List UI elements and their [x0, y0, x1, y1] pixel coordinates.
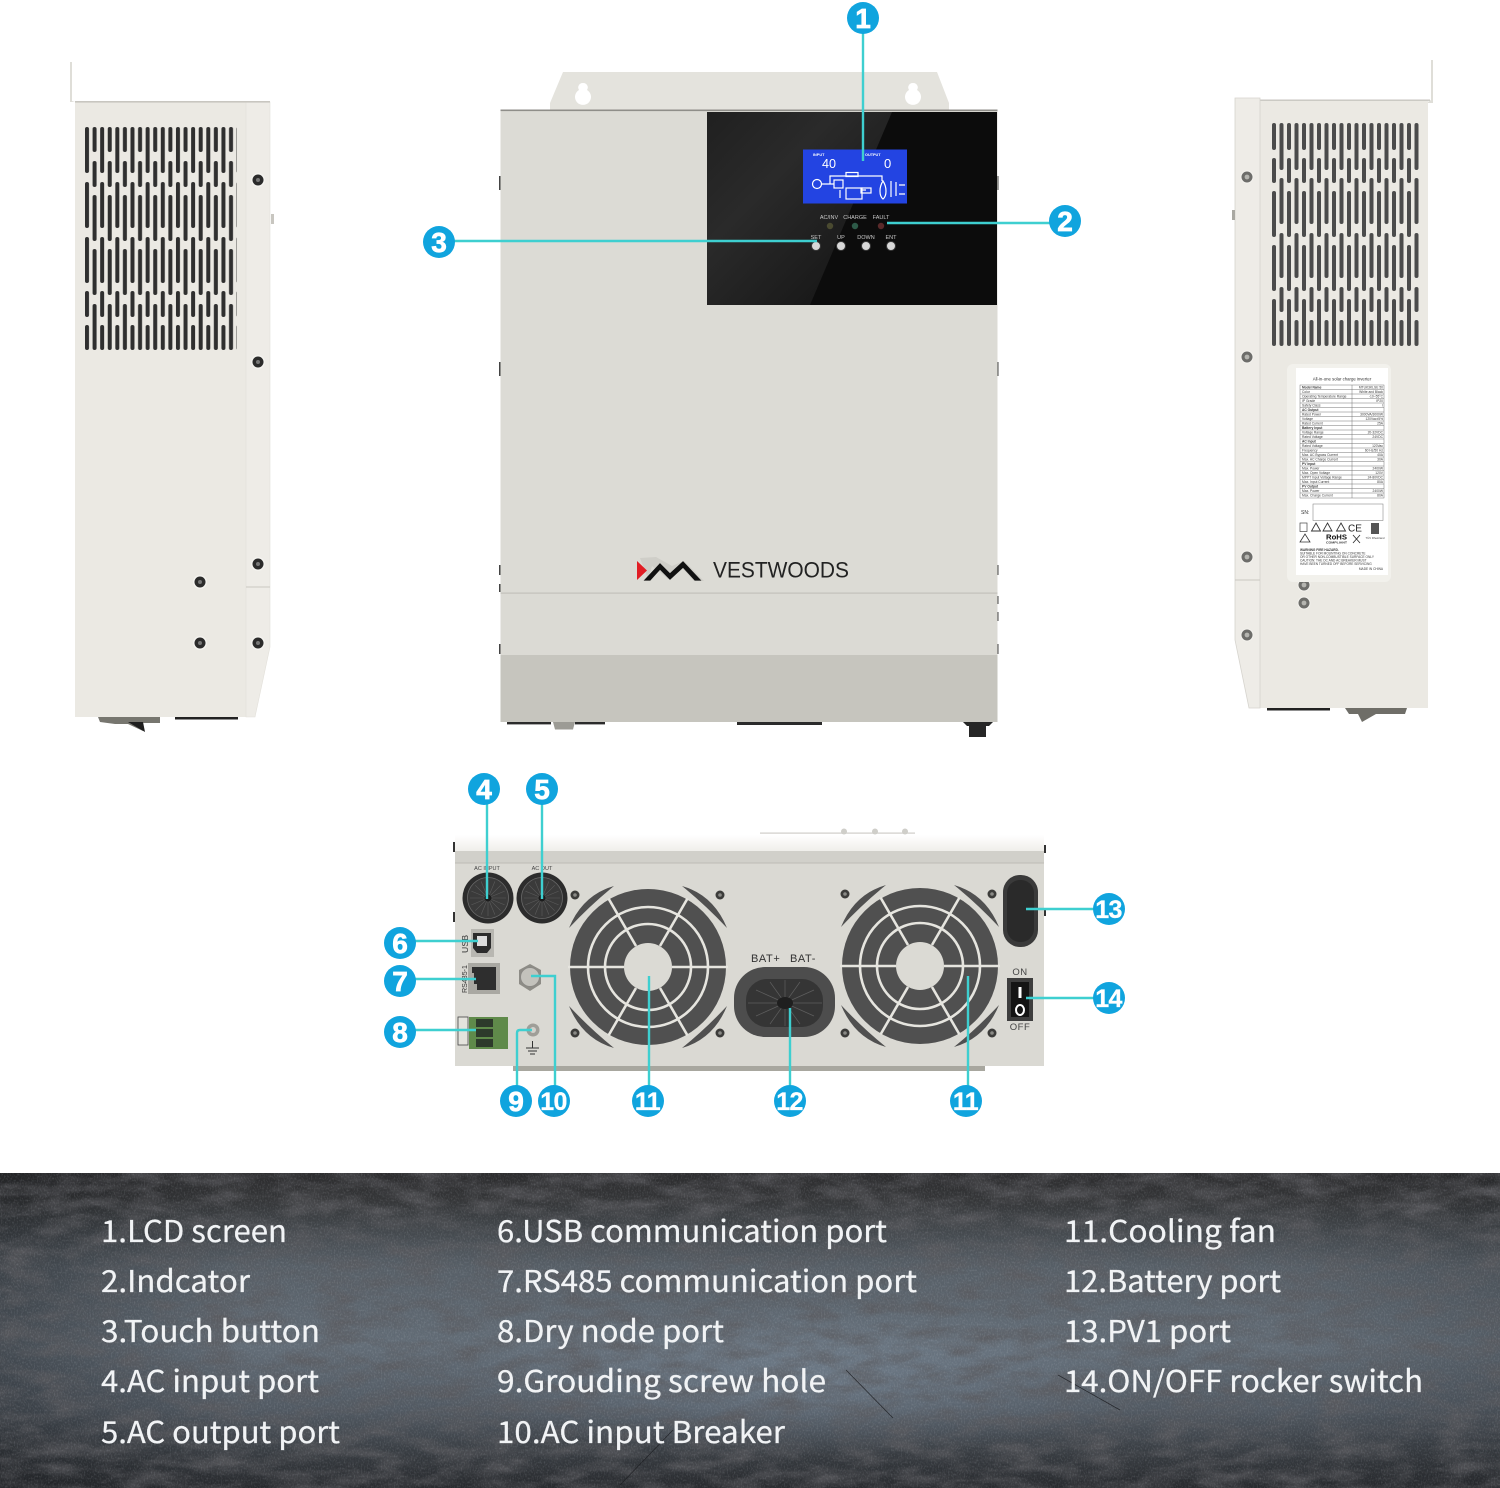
callout 11: cooling fan right: 11	[953, 1088, 979, 1116]
callout 10: AC input breaker	[531, 976, 570, 1117]
indicator labels: DOWN	[857, 235, 875, 241]
label spec table: Max. AC Charge Current	[1302, 458, 1338, 462]
label spec table: Battery Input	[1302, 426, 1323, 430]
legend column 1: 5.AC output port	[101, 1408, 340, 1452]
callout 12: battery port	[774, 1008, 806, 1117]
callout 11: cooling fan left	[632, 976, 664, 1117]
callout 4: AC input port	[468, 773, 500, 899]
certification marks: CE	[1348, 524, 1362, 534]
label spec table: 40A	[1377, 453, 1384, 457]
cooling fan left	[568, 886, 728, 1048]
label spec table: White and Black	[1359, 390, 1383, 394]
panel: left side view	[70, 62, 274, 732]
left side strip	[246, 102, 270, 717]
fan left screws	[570, 890, 724, 1038]
legend column 2: 9.Grouding screw hole	[497, 1357, 826, 1401]
warning text: HAVE BEEN TURNED OFF BEFORE SERVICING	[1300, 562, 1372, 566]
legend column 2: 10.AC input Breaker	[497, 1408, 785, 1452]
right side body	[1260, 100, 1428, 708]
legend column 2	[497, 1207, 917, 1452]
indicator labels: CHARGE	[843, 215, 867, 221]
label spec table: 120V	[1375, 471, 1384, 475]
LCD screen	[803, 150, 907, 204]
label spec table: 2400W	[1373, 466, 1384, 470]
LCD screen: 40	[822, 156, 836, 171]
control panel	[707, 112, 997, 305]
callout 11: cooling fan right	[950, 976, 982, 1117]
callout 9: grounding screw hole	[500, 1030, 532, 1117]
warning text: SUITABLE FOR MOUNTING ON CONCRETE	[1300, 552, 1365, 556]
label spec table: 2400W	[1373, 489, 1384, 493]
AC port labels: AC INPUT	[474, 866, 500, 872]
callout 13: PV1 port	[1026, 893, 1125, 925]
callout 3: touch button: 3	[431, 227, 447, 258]
left side screws	[193, 173, 265, 650]
indicator labels: SET	[811, 235, 822, 241]
label spec table: 30A	[1377, 458, 1384, 462]
touch buttons	[812, 242, 896, 250]
right side feet	[1267, 708, 1407, 722]
legend column 3: 12.Battery port	[1064, 1257, 1281, 1301]
legend column 2: 6.USB communication port	[497, 1207, 887, 1251]
callout 13: PV1 port: 13	[1095, 896, 1122, 924]
certification marks	[1300, 523, 1385, 544]
front side nubs	[499, 176, 998, 654]
AC port labels	[474, 866, 553, 872]
fan right screws	[840, 890, 996, 1038]
AC input breaker	[519, 964, 541, 991]
certification marks: RoHS	[1326, 532, 1347, 542]
AC input grommet	[462, 872, 514, 924]
dry node port	[458, 1017, 508, 1049]
RS485 port	[460, 963, 500, 994]
LCD screen: OUTPUT	[865, 153, 881, 157]
label spec table: Voltage	[1302, 417, 1313, 421]
panel: right side view	[1232, 60, 1433, 722]
USB port	[460, 929, 494, 957]
label spec table: IP20	[1376, 399, 1383, 403]
serial number box	[1301, 504, 1383, 520]
certification marks: COMPLIANT	[1326, 540, 1347, 544]
PV1 port	[1003, 875, 1038, 947]
legend column 1: 1.LCD screen	[101, 1207, 287, 1251]
callout 5: AC output port	[526, 773, 558, 899]
front mounting bracket	[550, 72, 949, 110]
rocker switch: ON	[1012, 967, 1028, 978]
front body middle	[500, 593, 998, 655]
label spec table: AC Input	[1302, 440, 1317, 444]
label spec table: 3000VA/3000W	[1360, 412, 1384, 416]
label spec table: 25A	[1377, 422, 1384, 426]
indicator labels: ENT	[886, 235, 897, 241]
battery port	[734, 953, 835, 1037]
Vestwoods logo	[637, 557, 849, 582]
callout 12: battery port: 12	[776, 1088, 803, 1116]
callout 7: RS485 port	[384, 965, 476, 997]
label spec table: 120Vac±5%	[1365, 417, 1383, 421]
label spec table: Max. Open Voltage	[1302, 471, 1330, 475]
rear top strip	[455, 851, 1044, 863]
legend column 1	[101, 1207, 340, 1452]
label spec table: Rated Voltage	[1302, 444, 1323, 448]
LCD screen: 0	[884, 156, 891, 171]
LCD screen: INPUT	[813, 153, 825, 157]
indicator labels: AC/INV	[820, 215, 838, 221]
legend column 1: 4.AC input port	[101, 1357, 319, 1401]
rating label	[1287, 364, 1391, 582]
label spec table: PV Input	[1302, 462, 1316, 466]
RS485 port: RS485-1	[460, 965, 469, 993]
callout 8: dry node port: 8	[392, 1017, 408, 1048]
label spec table: -10~55°C	[1369, 394, 1384, 398]
legend column 2: 8.Dry node port	[497, 1307, 724, 1351]
AC port labels: AC OUT	[532, 866, 553, 872]
label spec table: I	[1382, 404, 1383, 408]
legend column 3: 11.Cooling fan	[1064, 1207, 1276, 1251]
legend column 3: 13.PV1 port	[1064, 1307, 1231, 1351]
indicator labels	[811, 215, 897, 241]
label spec table: IP Grade	[1302, 399, 1315, 403]
Vestwoods logo: VESTWOODS	[713, 558, 849, 582]
cooling fan right	[840, 885, 1000, 1047]
legend column 3: 14.ON/OFF rocker switch	[1064, 1357, 1423, 1401]
label spec table: MPPT Input Voltage Range	[1302, 476, 1342, 480]
callout 14: rocker switch	[1026, 982, 1125, 1014]
panel: rear view	[453, 828, 1046, 1071]
label spec table: Frequency	[1302, 448, 1318, 452]
callout 6: USB port: 6	[392, 928, 408, 959]
indicator labels: UP	[837, 235, 845, 241]
left side mounting bracket	[70, 62, 75, 102]
right side mounting bracket	[1426, 60, 1433, 103]
left side body	[75, 102, 246, 717]
warning text: WARNING FIRE HAZARD.	[1300, 548, 1339, 552]
label spec table: 80A	[1377, 480, 1384, 484]
label spec table: 80A	[1377, 494, 1384, 498]
label spec table: Rated Current	[1302, 422, 1323, 426]
legend column 3	[1064, 1207, 1423, 1401]
callout 4: AC input port: 4	[476, 774, 492, 805]
label spec table: 120Vac	[1372, 444, 1383, 448]
panel: legend footer	[0, 1173, 1500, 1488]
label spec table: Max. Power	[1302, 466, 1320, 470]
battery port: BAT+	[751, 953, 780, 965]
label spec table: Color	[1302, 390, 1311, 394]
rear side nubs	[453, 842, 1046, 922]
asphalt background	[0, 1173, 1500, 1488]
rear top surface	[455, 828, 1044, 852]
label spec table: Operating Temperature Range	[1302, 394, 1347, 398]
callout 7: RS485 port: 7	[392, 966, 408, 997]
warning text	[1300, 548, 1384, 571]
label spec table: Rated Voltage	[1302, 435, 1323, 439]
label spec table: Safety Class	[1302, 404, 1321, 408]
label title: All-in-one solar charge inverter	[1313, 376, 1372, 382]
label spec table: AC Output	[1302, 408, 1319, 412]
label spec table	[1300, 385, 1384, 498]
warning text: OR OTHER NON-COMBUSTIBLE SURFACE ONLY	[1300, 555, 1375, 559]
indicator labels: FAULT	[873, 215, 890, 221]
rear plate	[455, 863, 1044, 1066]
callout 3: touch button	[423, 226, 817, 258]
left vent slots	[85, 127, 237, 351]
grounding screw	[526, 1024, 540, 1054]
left side feet	[98, 717, 238, 732]
callout 6: USB port	[384, 927, 478, 959]
front body lower band	[500, 655, 998, 722]
panel: front view	[499, 72, 998, 737]
label spec table: Model Name	[1302, 386, 1322, 390]
warning text: CAUTION: THE DC AND AC BREAKER MUST	[1300, 558, 1367, 562]
warning text: MADE IN CHINA	[1359, 567, 1384, 571]
label spec table: PV Output	[1302, 484, 1319, 488]
callout 10: AC input breaker: 10	[540, 1088, 567, 1116]
label spec table: 24VDC	[1372, 435, 1384, 439]
AC output grommet	[516, 872, 568, 924]
callout 2: indicator: 2	[1057, 206, 1073, 237]
legend column 1: 3.Touch button	[101, 1307, 320, 1351]
USB port: USB	[460, 935, 470, 953]
legend column 2: 7.RS485 communication port	[497, 1257, 917, 1301]
label spec table: Max. Input Current	[1302, 480, 1329, 484]
label spec table: 60 Hz/50 Hz	[1365, 448, 1383, 452]
front body upper	[500, 110, 998, 593]
label spec table: MTUK3KLSE 50	[1359, 386, 1383, 390]
label spec table: Max. Charge Current	[1302, 494, 1333, 498]
right side strip	[1235, 98, 1260, 708]
right side screws	[1240, 170, 1310, 642]
indicator LEDs	[827, 223, 884, 229]
rear base lip	[513, 1066, 985, 1071]
callout 5: AC output port: 5	[534, 774, 550, 805]
callout 14: rocker switch: 14	[1095, 985, 1122, 1013]
callout 2: indicator	[887, 205, 1081, 237]
callout 8: dry node port	[384, 1016, 476, 1048]
callout 1: LCD screen: 1	[855, 3, 871, 34]
serial number box: SN:	[1301, 510, 1309, 516]
label spec table: Max. Power	[1302, 489, 1320, 493]
label spec table: Voltage Range	[1302, 430, 1324, 434]
front feet	[507, 722, 993, 737]
label spec table: Max. AC Bypass Current	[1302, 453, 1338, 457]
callout 11: cooling fan left: 11	[635, 1088, 661, 1116]
label spec table: Rated Power	[1302, 412, 1322, 416]
callout 9: grounding screw hole: 9	[508, 1086, 524, 1117]
label spec table: 20-32VDC	[1368, 430, 1384, 434]
right vent slots	[1272, 123, 1419, 347]
rocker switch	[1007, 967, 1033, 1033]
legend column 1: 2.Indcator	[101, 1257, 250, 1301]
battery port: BAT-	[790, 953, 816, 965]
certification marks: TÜV Rheinland	[1366, 536, 1385, 540]
rocker switch: OFF	[1010, 1022, 1030, 1033]
callout 1: LCD screen	[847, 2, 879, 161]
label spec table: 24-80VDC	[1368, 476, 1384, 480]
